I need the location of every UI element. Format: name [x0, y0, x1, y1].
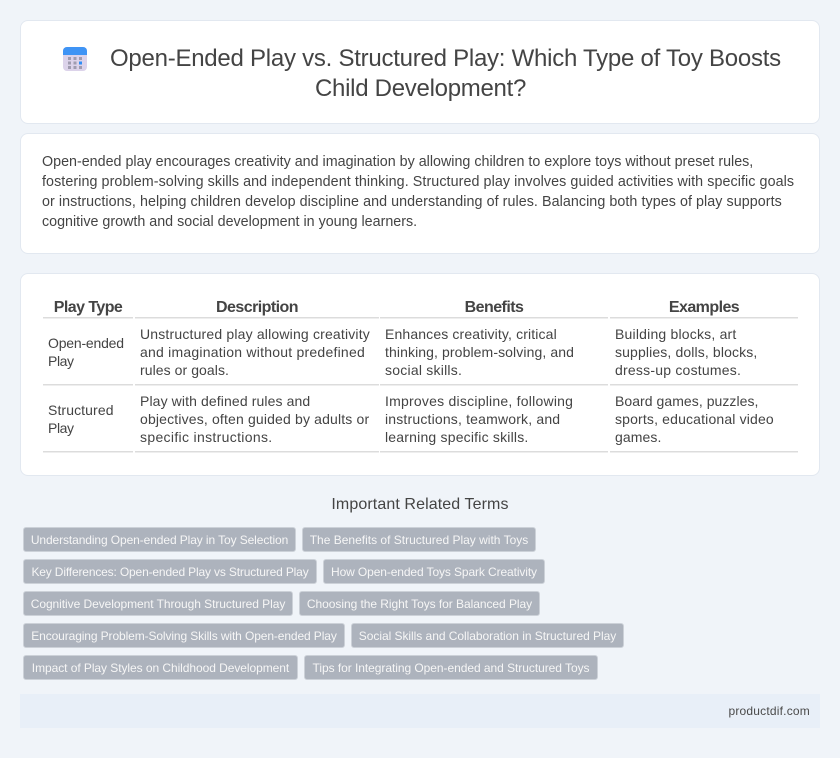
table row: structured play: Improves discipline, following — [385, 393, 573, 409]
table row: open-ended play: Building blocks, art — [615, 326, 737, 342]
text: summary: or instructions, helping children develop discipline and understanding of rules. Balancing both types of play supports — [42, 194, 782, 210]
panel: summary paragraph — [20, 133, 820, 254]
tag list: related terms: Choosing the Right Toys for Balanced Play — [307, 597, 532, 611]
tag list: related terms: Social Skills and Collaboration in Structured Play — [359, 629, 616, 643]
footer bar — [20, 694, 820, 728]
table header: Benefits — [465, 299, 523, 316]
table row: open-ended play: and imagination without predefined — [140, 344, 365, 360]
tag list: related terms: Encouraging Problem-Solving Skills with Open-ended Play — [31, 629, 337, 643]
panel: comparison table — [20, 273, 820, 476]
table row: structured play: instructions, teamwork, and — [385, 411, 560, 427]
text: summary — [42, 154, 794, 230]
table row: structured play — [48, 393, 774, 445]
title — [110, 45, 781, 102]
table row: structured play: learning specific skills. — [385, 429, 528, 445]
heading: related terms: Important Related Terms — [331, 496, 509, 513]
tag list: related terms — [23, 527, 624, 680]
tag list: related terms: Key Differences: Open-ended Play vs Structured Play — [31, 565, 309, 579]
title: Open-Ended Play vs. Structured Play: Which Type of Toy Boosts — [110, 45, 781, 72]
tag list: related terms: The Benefits of Structured Play with Toys — [310, 533, 528, 547]
text: summary: Open-ended play encourages creativity and imagination by allowing children to explore toys without preset rules, — [42, 154, 753, 170]
panel: title card — [20, 20, 820, 124]
tag list: related terms: Understanding Open-ended Play in Toy Selection — [31, 533, 288, 547]
table row: structured play: objectives, often guided by adults or — [140, 411, 369, 427]
table header: Examples — [669, 299, 739, 316]
table row: open-ended play: rules or goals. — [140, 362, 229, 378]
table header: Play Type — [54, 299, 122, 316]
tag list: related terms: Impact of Play Styles on Childhood Development — [32, 661, 289, 675]
table row: open-ended play: thinking, problem-solving, and — [385, 344, 574, 360]
tag list: related terms: Cognitive Development Through Structured Play — [31, 597, 285, 611]
table row: open-ended play: supplies, dolls, blocks, — [615, 344, 757, 360]
text: summary: cognitive growth and social development in young learners. — [42, 214, 417, 230]
table row: structured play: games. — [615, 429, 662, 445]
icon: calendar grid — [63, 47, 87, 71]
table header — [54, 299, 739, 316]
table row: structured play: Structured — [48, 402, 114, 418]
table header: Description — [216, 299, 298, 316]
title: Child Development? — [315, 75, 526, 102]
table row: open-ended play: Enhances creativity, critical — [385, 326, 557, 342]
text: summary: fostering problem-solving skills and independent thinking. Structured play involves guided activities with specific goals — [42, 174, 794, 190]
table row: structured play: sports, educational video — [615, 411, 774, 427]
tag list: related terms: Tips for Integrating Open-ended and Structured Toys — [313, 661, 589, 675]
table row: structured play: Play — [48, 420, 74, 436]
table row: open-ended play: Open-ended — [48, 335, 124, 351]
table row: open-ended play: Unstructured play allowing creativity — [140, 326, 370, 342]
table row: structured play: Play with defined rules and — [140, 393, 310, 409]
table row: open-ended play — [48, 326, 757, 378]
table row: structured play: Board games, puzzles, — [615, 393, 758, 409]
table row: open-ended play: dress-up costumes. — [615, 362, 741, 378]
footer source text: productdif.com — [728, 704, 810, 718]
table row: open-ended play: Play — [48, 353, 74, 369]
tag list: related terms: How Open-ended Toys Spark Creativity — [331, 565, 537, 579]
table row: structured play: specific instructions. — [140, 429, 273, 445]
table row: open-ended play: social skills. — [385, 362, 462, 378]
